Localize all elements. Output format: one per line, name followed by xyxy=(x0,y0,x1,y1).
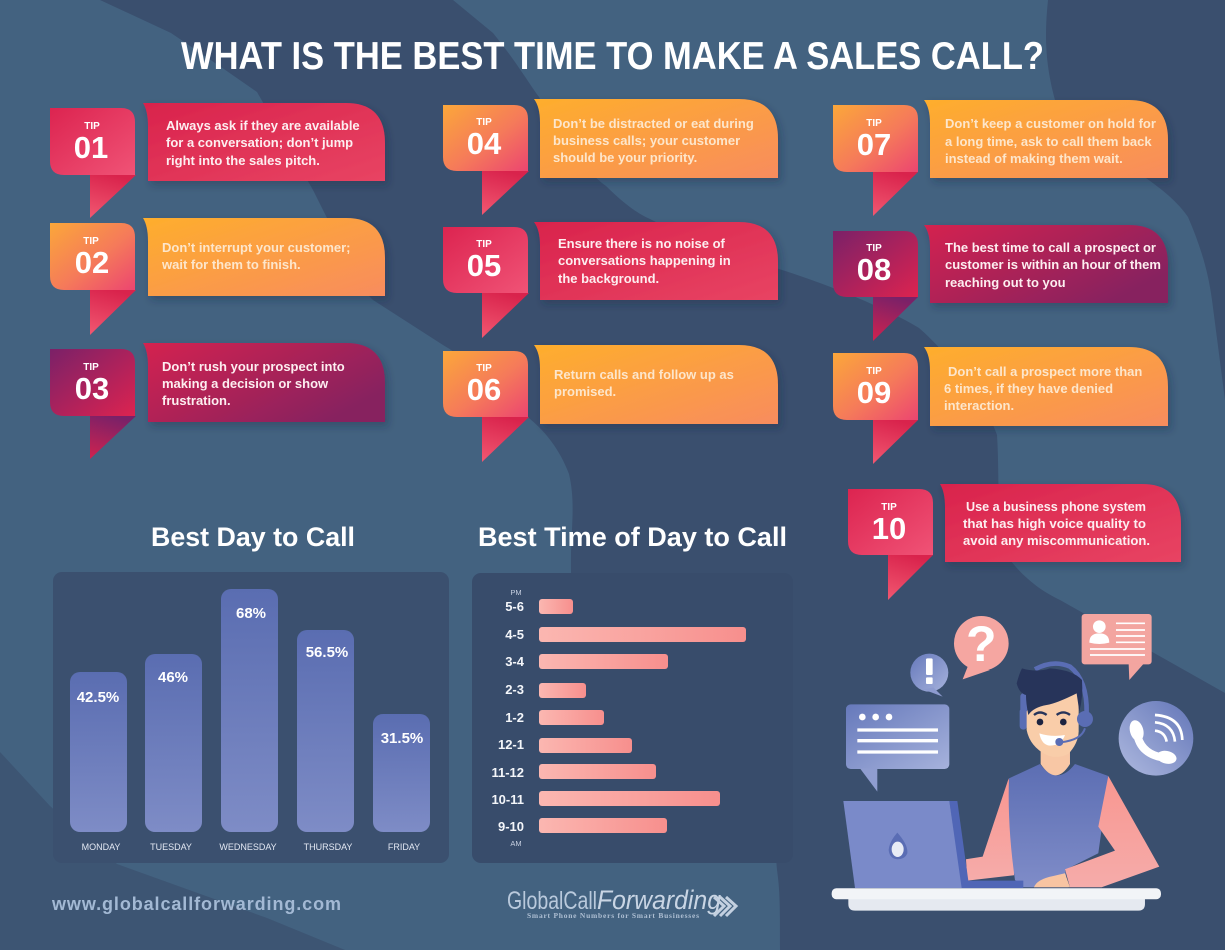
tip 10 text: Use a business phone system xyxy=(966,499,1146,514)
agent figure xyxy=(966,664,1159,887)
tip 09 pointer xyxy=(873,420,918,464)
tip 08 xyxy=(833,225,1168,341)
tip 02 label: TIP xyxy=(83,236,99,247)
tip 06 badge xyxy=(443,351,528,417)
tip 09 text: Don’t call a prospect more than xyxy=(948,364,1142,379)
tip 05 pointer xyxy=(482,293,529,338)
agent neck xyxy=(1041,750,1070,775)
bar: tuesday 46% xyxy=(145,654,202,852)
tip 07 xyxy=(833,100,1168,216)
bar: friday 31.5%: FRIDAY xyxy=(388,842,420,852)
tip 06 number: 06 xyxy=(467,372,501,407)
agent left arm xyxy=(966,778,1015,881)
tip 05 text: conversations happening in xyxy=(558,253,731,268)
heading: best day to call: Best Day to Call xyxy=(151,522,355,552)
tip 08 number: 08 xyxy=(857,252,891,287)
bar: monday 42.5% xyxy=(70,672,127,852)
row 9-10 xyxy=(498,818,667,834)
panel: best day bar chart xyxy=(53,572,449,863)
tip 10 card xyxy=(940,484,1181,562)
icon: phone circle xyxy=(1119,701,1193,776)
tip 07 number: 07 xyxy=(857,127,891,162)
tip 07 text: Don’t keep a customer on hold for xyxy=(945,116,1156,131)
tip 01 badge xyxy=(50,108,135,175)
tip 07 text: a long time, ask to call them back xyxy=(945,134,1152,149)
tip 03 text: Don’t rush your prospect into xyxy=(162,359,345,374)
agent hand xyxy=(1034,873,1070,887)
tip 05 text: the background. xyxy=(558,271,659,286)
row 4-5 xyxy=(505,627,746,642)
tip 10 pointer xyxy=(888,555,933,600)
row 11-12: 11-12 xyxy=(491,765,524,780)
tip 01 text: right into the sales pitch. xyxy=(166,153,320,168)
agent left ear pad xyxy=(1012,697,1035,726)
row 2-3 xyxy=(505,682,586,698)
agent ear cup xyxy=(1077,711,1093,727)
tip 09 text: 6 times, if they have denied xyxy=(944,381,1113,396)
tip 05 label: TIP xyxy=(476,239,492,250)
tip 06 xyxy=(443,345,778,462)
tip 08 text: reaching out to you xyxy=(945,275,1066,290)
tip 07 text: instead of making them wait. xyxy=(945,151,1123,166)
logo: Forwarding xyxy=(597,885,721,915)
tip 02 number: 02 xyxy=(75,245,109,280)
icon: chat bubble xyxy=(846,704,949,792)
tip 08 text xyxy=(945,240,1161,290)
tip 06 card xyxy=(534,345,778,424)
tip 09 xyxy=(833,347,1168,464)
tip 01 number: 01 xyxy=(74,130,108,165)
row 1-2: 1-2 xyxy=(505,710,524,725)
tip 03 label: TIP xyxy=(83,362,99,373)
tip 04 text: should be your priority. xyxy=(553,150,697,165)
tip 03 text: making a decision or show xyxy=(162,376,329,391)
tip 05 xyxy=(443,222,778,338)
row 10-11: 10-11 xyxy=(491,792,524,807)
tip 06 label: TIP xyxy=(476,363,492,374)
tip 04 label: TIP xyxy=(476,117,492,128)
bar: wednesday 68%: 68% xyxy=(236,605,266,622)
tip 04 pointer xyxy=(482,171,529,215)
agent face xyxy=(1027,690,1079,757)
row 1-2 xyxy=(505,710,604,725)
heading: best time of day to call: Best Time of Day to Call xyxy=(478,522,787,552)
tip 02 text xyxy=(161,240,351,272)
tip 06 text: promised. xyxy=(554,384,616,399)
tip 09 card xyxy=(924,347,1168,426)
tip 04 text: Don’t be distracted or eat during xyxy=(553,116,754,131)
tip 01 text: Always ask if they are available xyxy=(166,118,360,133)
logo xyxy=(507,885,736,920)
illustration: call centre agent xyxy=(832,614,1193,911)
tip 03 badge xyxy=(50,349,135,416)
tip 05 text xyxy=(558,236,731,286)
agent shirt xyxy=(1009,764,1108,887)
tip 03 number: 03 xyxy=(75,371,109,406)
tip 01 label: TIP xyxy=(84,121,100,132)
logo: GlobalCall xyxy=(507,887,597,915)
tip 10 label: TIP xyxy=(881,502,897,513)
tip 01 xyxy=(50,103,385,218)
tip 10 text xyxy=(963,499,1150,548)
agent headband xyxy=(1035,664,1087,713)
tip 09 label: TIP xyxy=(866,366,882,377)
row 9-10: 9-10 xyxy=(498,819,524,834)
row 5-6: 5-6 xyxy=(505,599,524,614)
row 4-5: 4-5 xyxy=(505,627,524,642)
bar: monday 42.5%: 42.5% xyxy=(77,689,119,706)
tip 03 xyxy=(50,343,385,459)
tip 01 text: for a conversation; don’t jump xyxy=(166,135,353,150)
row 12-1: 12-1 xyxy=(498,737,524,752)
tip 06 text: Return calls and follow up as xyxy=(554,367,734,382)
icon: profile card bubble xyxy=(1082,614,1152,680)
row 3-4 xyxy=(505,654,668,669)
website url: www.globalcallforwarding.com xyxy=(51,894,341,914)
tip 03 text xyxy=(162,359,345,408)
row 3-4: 3-4 xyxy=(505,654,525,669)
bar: wednesday 68% xyxy=(219,589,278,852)
agent eyes and brows xyxy=(1034,712,1070,725)
bar: thursday 56.5% xyxy=(297,630,354,852)
tip 09 text xyxy=(944,364,1142,413)
tip 08 pointer xyxy=(873,297,918,341)
pm label: PM xyxy=(510,588,522,597)
tip 05 text: Ensure there is no noise of xyxy=(558,236,726,251)
tip 08 badge xyxy=(833,231,918,297)
am label: AM xyxy=(510,839,522,848)
row 5-6 xyxy=(505,599,573,614)
tip 10 xyxy=(848,484,1181,600)
icon: question bubble xyxy=(954,616,1009,679)
tip 04 text xyxy=(553,116,754,165)
tip 02 text: Don’t interrupt your customer; xyxy=(162,240,351,255)
agent right arm xyxy=(1065,776,1159,887)
tip 02 text: wait for them to finish. xyxy=(161,257,301,272)
tip 06 text xyxy=(554,367,734,399)
tip 04 card xyxy=(534,99,778,178)
icon: question bubble: ? xyxy=(966,616,997,672)
icon: exclamation bubble xyxy=(910,654,948,697)
panel: best time horizontal bar chart xyxy=(472,573,793,863)
tip 05 number: 05 xyxy=(467,248,501,283)
tip 05 card xyxy=(534,222,778,300)
tip 06 pointer xyxy=(482,417,529,462)
tip 10 text: that has high voice quality to xyxy=(963,516,1146,531)
tip 04 badge xyxy=(443,105,528,171)
desk xyxy=(832,888,1161,911)
tip 04 number: 04 xyxy=(467,126,502,161)
tip 09 number: 09 xyxy=(857,375,891,410)
row 10-11 xyxy=(491,791,720,807)
tip 02 xyxy=(50,218,385,335)
tip 10 badge xyxy=(848,489,933,555)
tip 07 text xyxy=(945,116,1156,166)
tip 02 badge xyxy=(50,223,135,290)
tip 09 badge xyxy=(833,353,918,420)
tip 09 text: interaction. xyxy=(944,398,1014,413)
tip 05 badge xyxy=(443,227,528,293)
agent microphone xyxy=(1055,728,1085,746)
tip 02 card xyxy=(143,218,385,296)
bar: wednesday 68%: WEDNESDAY xyxy=(219,842,277,852)
tip 03 card xyxy=(143,343,385,422)
tip 10 text: avoid any miscommunication. xyxy=(963,533,1150,548)
bar: friday 31.5%: 31.5% xyxy=(381,730,423,747)
row 2-3: 2-3 xyxy=(505,682,524,697)
tip 08 card xyxy=(924,225,1168,303)
tip 04 text: business calls; your customer xyxy=(553,133,740,148)
bar: tuesday 46%: 46% xyxy=(158,669,188,686)
logo: Smart Phone Numbers for Smart Businesses xyxy=(527,911,699,920)
laptop xyxy=(843,801,1023,888)
agent smile xyxy=(1039,733,1065,746)
tip 01 text xyxy=(166,118,360,168)
tip 07 pointer xyxy=(873,172,918,216)
tip 08 text: customer is within an hour of them xyxy=(945,257,1161,272)
tip 03 pointer xyxy=(90,416,136,459)
tip 07 label: TIP xyxy=(866,118,882,129)
tip 01 pointer xyxy=(90,175,136,218)
bar: monday 42.5%: MONDAY xyxy=(82,842,120,852)
bar: tuesday 46%: TUESDAY xyxy=(150,842,192,852)
tip 03 text: frustration. xyxy=(162,393,231,408)
tip 07 badge xyxy=(833,105,918,172)
tip 02 pointer xyxy=(90,290,136,335)
tip 08 label: TIP xyxy=(866,243,882,254)
bar: friday 31.5% xyxy=(373,714,430,852)
tip 04 xyxy=(443,99,778,215)
tip 01 card xyxy=(143,103,385,181)
agent hair xyxy=(1017,668,1082,715)
tip 08 text: The best time to call a prospect or xyxy=(945,240,1156,255)
row 12-1 xyxy=(498,737,632,753)
bar: thursday 56.5%: 56.5% xyxy=(306,644,348,661)
tip 10 number: 10 xyxy=(872,511,906,546)
bar: thursday 56.5%: THURSDAY xyxy=(304,842,352,852)
title: WHAT IS THE BEST TIME TO MAKE A SALES CALL? xyxy=(181,35,1044,78)
tip 07 card xyxy=(924,100,1168,178)
row 11-12 xyxy=(491,764,656,780)
